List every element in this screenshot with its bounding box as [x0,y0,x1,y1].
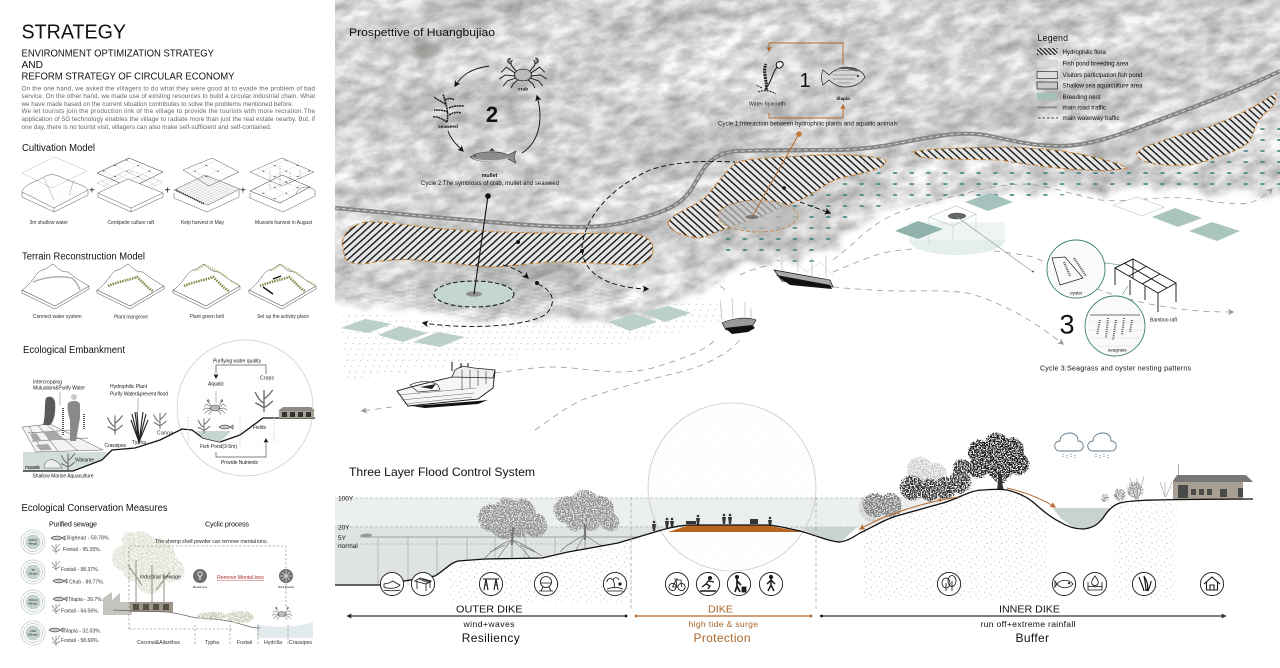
water bodies [800,508,1110,541]
callout circle: oyster [1047,240,1105,298]
illustration: mussel [44,460,62,468]
zone label: inner dike [980,604,1076,645]
number 1: 1 [799,70,811,92]
breeding nests: left group [341,306,691,347]
text block: strategy description: service. On the other hand, we made use of existing resources to build a circular industrial chain. What [22,93,315,100]
icon: mullet [470,148,516,163]
flow arrows [60,365,274,457]
arrows: cycle 2 [448,66,540,153]
legend swatches [1037,48,1058,118]
icon: crab [499,58,547,88]
heading: Ecological Conservation Measures: Ecological Conservation Measures [22,503,168,514]
zone label: dike: DIKE [708,604,733,616]
illustration: farmhouse [278,407,315,418]
cycle 1: hyacinth and tilapia [718,43,898,128]
text: cycle labels: Remove Mental Ions [217,575,264,581]
icons: inner dike activities [937,572,1224,596]
text: embankment labels: Provide Nutrients [221,460,258,466]
waterway nodes [516,186,786,285]
fish pond water [196,431,231,442]
text: Bamboo raft: Bamboo raft [1150,318,1178,324]
illustration: large boat [397,362,495,408]
icon: fish [1052,572,1076,596]
text: cycle labels: Foxtail [237,640,252,646]
icons: dike activities [665,572,783,596]
illustration: inner dike trees [859,433,1172,522]
icon: shell powder [279,569,293,583]
visitor fish pond ellipse: cycle 1 [718,200,798,232]
stipple soil [448,490,1177,602]
text: cycle 1 caption: Cycle 1:Interaction between hydrophilic plants and aquatic animals [718,120,898,128]
text: Purified sewage: Purified sewage [49,520,97,528]
illustration: small boat [720,298,756,334]
orange dike core [668,526,802,532]
terrain line [113,610,260,628]
hydrophilic flora: right centre [912,147,1127,171]
illustration: tree trunks [128,560,170,605]
diagram: cyclic process section [103,531,313,646]
illustration: reeds [197,611,254,623]
rate group: NO2-N: Foxtail - 64.56%. [61,608,99,614]
zone label: outer dike [456,604,523,645]
heading: Cultivation Model: Cultivation Model [22,143,95,154]
diagram step: centipede culture raft [97,158,163,212]
subtitle: strategy names: REFORM STRATEGY OF CIRCULAR ECONOMY [22,72,235,82]
subtitle: strategy names [22,48,235,82]
zone label: inner dike: Buffer [1016,631,1049,645]
text: terrain captions [33,314,309,320]
illustration: bamboo raft [1091,259,1176,312]
legend labels: main waterway traffic [1062,115,1120,122]
number 2: 2 [486,102,498,127]
icon: house [1200,572,1224,596]
text: Mussels harvest in August: Mussels harvest in August [255,220,313,226]
grid: fish pond breeding area [347,266,652,322]
diagram step: mussels harvest [250,158,315,212]
zone label: outer dike: Resiliency [462,631,520,645]
callout circle: dike [648,403,816,571]
text block: strategy description [20,86,315,131]
zone label: outer dike: OUTER DIKE [456,604,523,616]
icon: skater [696,572,720,596]
zone bars [347,614,1226,618]
text: cycle labels: Shell Powder [278,585,294,589]
vertical dividers [631,497,816,610]
text: mullet: mullet [482,173,498,179]
text: cycle 2 caption: Cycle 2:The symbiosis of crab, mullet and seaweed [421,181,559,187]
rate group: TP: Foxtail - 98.37%. [61,567,99,573]
illustration: hydrophilic plants [61,412,166,470]
icon: bicycle [665,572,689,596]
illustration: people on dike [652,514,772,531]
illustration: factory [103,592,132,615]
legend labels: Visitors participation fish pond [1062,72,1143,79]
breeding dashes field [718,125,1280,262]
diagram step: kelp harvest [174,158,240,212]
orange runoff arrows [860,488,1055,529]
icon: picnic table [479,572,503,596]
plus sign: + [89,186,95,196]
rate group: NO2-N: 40mg/L [28,602,38,606]
text: cycle labels: Crassipes [289,640,312,646]
text: cycle 3 caption: Cycle 3:Seagrass and oyster nesting patterns [1040,366,1192,372]
stippled shallow sea [342,298,726,380]
legend labels: Hydrophilic flora [1062,49,1107,56]
hydrophilic flora: middle [668,155,886,238]
illustration: pond life [198,390,273,434]
icon: jet ski [380,572,404,596]
background: grey tidal land texture [335,0,1280,326]
rate group: TP: Chub - 89.77%. [69,580,104,586]
shallow water block [23,452,110,471]
text: cycle labels: Typha [205,640,219,646]
text: cycle labels: Coconut&Ailanthus [137,640,180,646]
callout circle: seagrass: seagrass [1108,348,1127,352]
text: cycle labels: The shrimp shell powder can remove mental ions. [155,539,268,545]
number 3: 3 [1059,310,1075,340]
flood levels band [335,498,960,585]
legend labels: main road traffic [1062,104,1106,112]
icon: walker [759,572,783,596]
zone label: inner dike: INNER DIKE [999,604,1060,616]
illustration: house [1173,464,1253,499]
legend labels: Shallow sea aquaculture area [1062,82,1143,90]
text: embankment labels [25,358,274,480]
text: water hyacinth: Water hyacinth [749,102,785,108]
text: embankment labels: mussels [25,465,40,471]
title: STRATEGY: STRATEGY [22,22,126,44]
text: terrain captions: Plant mangrove [114,314,148,320]
water body [257,622,313,638]
pin: cycle 1 [745,131,802,219]
diagram step: plant mangrove [97,264,164,309]
pin: cycle 2 [466,193,491,297]
text: embankment labels: Purify Water&prevent flood [110,392,168,398]
rate group: TP: 10mg/L [28,572,38,576]
text: terrain captions: Plant green belt [190,314,225,320]
heading: Terrain Reconstruction Model: Terrain Reconstruction Model [22,252,145,262]
text: terrain captions: Connect water system [33,314,82,320]
text: embankment labels: Mutualism&Purify Water [33,386,85,392]
subtitle: strategy names: AND [22,60,43,71]
text: seaweed: seaweed [438,124,458,130]
text: embankment labels: Wakame [75,458,94,464]
text block: strategy description: application of 5G technology enables the village to radiate more than just the real estate nearby. But, if [22,116,315,123]
diagram: ecological embankment section [22,340,315,480]
rate group: COD: Foxtail - 58.66%. [61,638,99,644]
text: embankment labels: Shallow Marine Aquaculture [32,474,94,480]
legend labels [1062,49,1143,122]
text: 3m shallow water: 3m shallow water [30,220,68,226]
subtitle: strategy names: ENVIRONMENT OPTIMIZATION STRATEGY [22,48,214,60]
floating module [909,206,1034,272]
text: cycle labels: Mental ions [193,585,208,589]
icon: pergola [411,572,435,596]
legend [1037,33,1143,122]
text block: strategy description: On the one hand, we asked the villagers to do what they were good at to evade the problem of bad [22,86,315,92]
diagram step: connect water system [22,264,89,309]
callout circle: seagrass [1085,296,1145,356]
panel: three layer flood control section [335,403,1253,645]
callout circle: oyster: oyster [1070,290,1083,296]
panel: perspective map [334,0,1280,430]
icon: seaweed [433,94,464,122]
heading: Three Layer Flood Control System: Three Layer Flood Control System [349,465,535,479]
icon: water [1083,572,1107,596]
zone label: dike: high tide & surge [688,619,758,629]
legend labels: Breeding nest [1062,94,1101,101]
legend labels: Fish pond breeding area [1062,60,1129,68]
illustration: raft deck [22,424,103,452]
level labels: 100Y [338,496,354,502]
rate group: COD: COD [30,629,36,633]
illustration: small boat at 5Y [360,534,372,537]
illustration: fishing boats [774,250,834,289]
arrows: cycle 1 [769,43,843,118]
icon: traveller with luggage [727,572,751,596]
heading: Ecological Embankment: Ecological Embankment [23,345,125,356]
icons: rain clouds [1055,433,1116,459]
icon: tilapia [822,67,865,87]
text block: strategy description: one day, there is no tourist visit, villagers can also make self-sufficient and self-contained. [22,124,272,131]
legend title: Legend [1038,33,1068,43]
arrows: main waterway traffic [423,161,830,326]
breeding nests: right group [895,193,1240,241]
rate group: NH3-N: NH3-N [29,538,37,542]
text block: strategy description: we have made based on the current situation contributes to solve the problems mentioned before. [20,101,294,108]
icon: water hyacinth [756,62,783,94]
text: crab: crab [518,86,528,92]
plus sign: + [240,186,246,196]
hydrophilic flora: left [342,222,653,267]
diagram: terrain reconstruction model [22,264,316,309]
hydrophilic flora: right [1137,93,1276,165]
rate group: COD [21,621,101,646]
dashed frame [129,546,288,646]
plus sign: + [164,186,170,196]
icon: mental ions [193,569,207,583]
text: embankment labels: Aquatic [208,382,224,388]
zone label: outer dike: wind+waves [462,619,514,629]
diagram: cultivation model [22,157,315,226]
rate group: TP [21,560,104,586]
level labels: normal [338,543,358,550]
level labels: 5Y [338,535,347,542]
text: Cyclic process: Cyclic process [205,520,249,528]
text: Centipede culture raft: Centipede culture raft [108,220,155,226]
text: terrain captions: Set up the activity place [257,314,309,320]
icon: reed [1132,572,1156,596]
diagram step: plant green belt [173,264,240,309]
rate group: NH3-N: Foxtail - 95.35%. [63,547,101,553]
text block: strategy description: We let tourists join the production link of the village to provide the tourists with more recration.The [22,108,315,115]
text: cycle labels: Industrial Sewage [140,574,181,580]
road: main road traffic [335,71,1280,227]
diagram step: shallow water [22,157,88,212]
level labels: 20Y [338,524,350,532]
illustration: crab [272,607,292,619]
text: embankment labels: Hydrophilic Plant [110,384,148,390]
rate group: NH3-N [21,530,110,554]
icon: palm beach [603,572,627,596]
illustration: pale trees [112,531,184,594]
illustration: building [130,602,173,612]
text: embankment labels: Purifying water quality [213,358,262,364]
zone label: dike [688,604,758,645]
heading: Prospettive of Huangbujiao: Prospettive of Huangbujiao [349,27,495,39]
rate group: NH3-N: Bighead - 59.78%. [67,536,110,542]
text: embankment labels: Intercropping [33,380,62,386]
visitor fish pond ellipse: cycle 2 [434,281,514,307]
rate group: NH3-N: 40mg/L [28,542,38,546]
text: embankment labels: Canna [157,430,173,436]
arrows: grey waterway routes [362,184,1272,430]
text: embankment labels: Fish Pond(3-5m) [200,444,237,450]
rate group: NO2-N: Tilapia - 39.7%. [68,597,103,603]
rate group: COD: 350mg/L [28,632,39,636]
terrain line [23,418,315,471]
text: embankment labels: Typha [132,440,146,446]
text: cycle labels [137,539,312,646]
text: embankment labels: Fields [253,425,266,431]
rate group: NO2-N: NO2-N [29,598,37,602]
list: sewage purification rates [21,530,110,646]
rate group: NO2-N [21,590,103,614]
panel: left strategy column [20,22,316,646]
illustration: mangrove trees [478,490,619,558]
text: tilapia: tilapia [836,96,850,101]
text: embankment labels: Crops [260,376,274,382]
icon: grill [534,572,558,596]
ground profile [335,489,1253,585]
text: Kelp harvest in May: Kelp harvest in May [181,220,224,226]
icons: outer dike activities [380,572,627,596]
illustration: farmers [43,394,84,441]
cycle 2: crab mullet seaweed [421,58,559,187]
text: cycle labels: Hydrilla [264,640,282,646]
zone label: inner dike: run off+extreme rainfall [980,619,1076,629]
diagram step: set up the activity place [249,264,316,309]
level labels [338,496,358,550]
text: embankment labels: Crassipes [104,443,126,449]
zone label: dike: Protection [694,631,750,645]
callout circle: fish pond cycle [177,340,313,476]
rate group: TP: TP [31,568,35,572]
rate group: COD: Tilapia - 32.03%. [63,628,101,634]
icon: trees [937,572,961,596]
